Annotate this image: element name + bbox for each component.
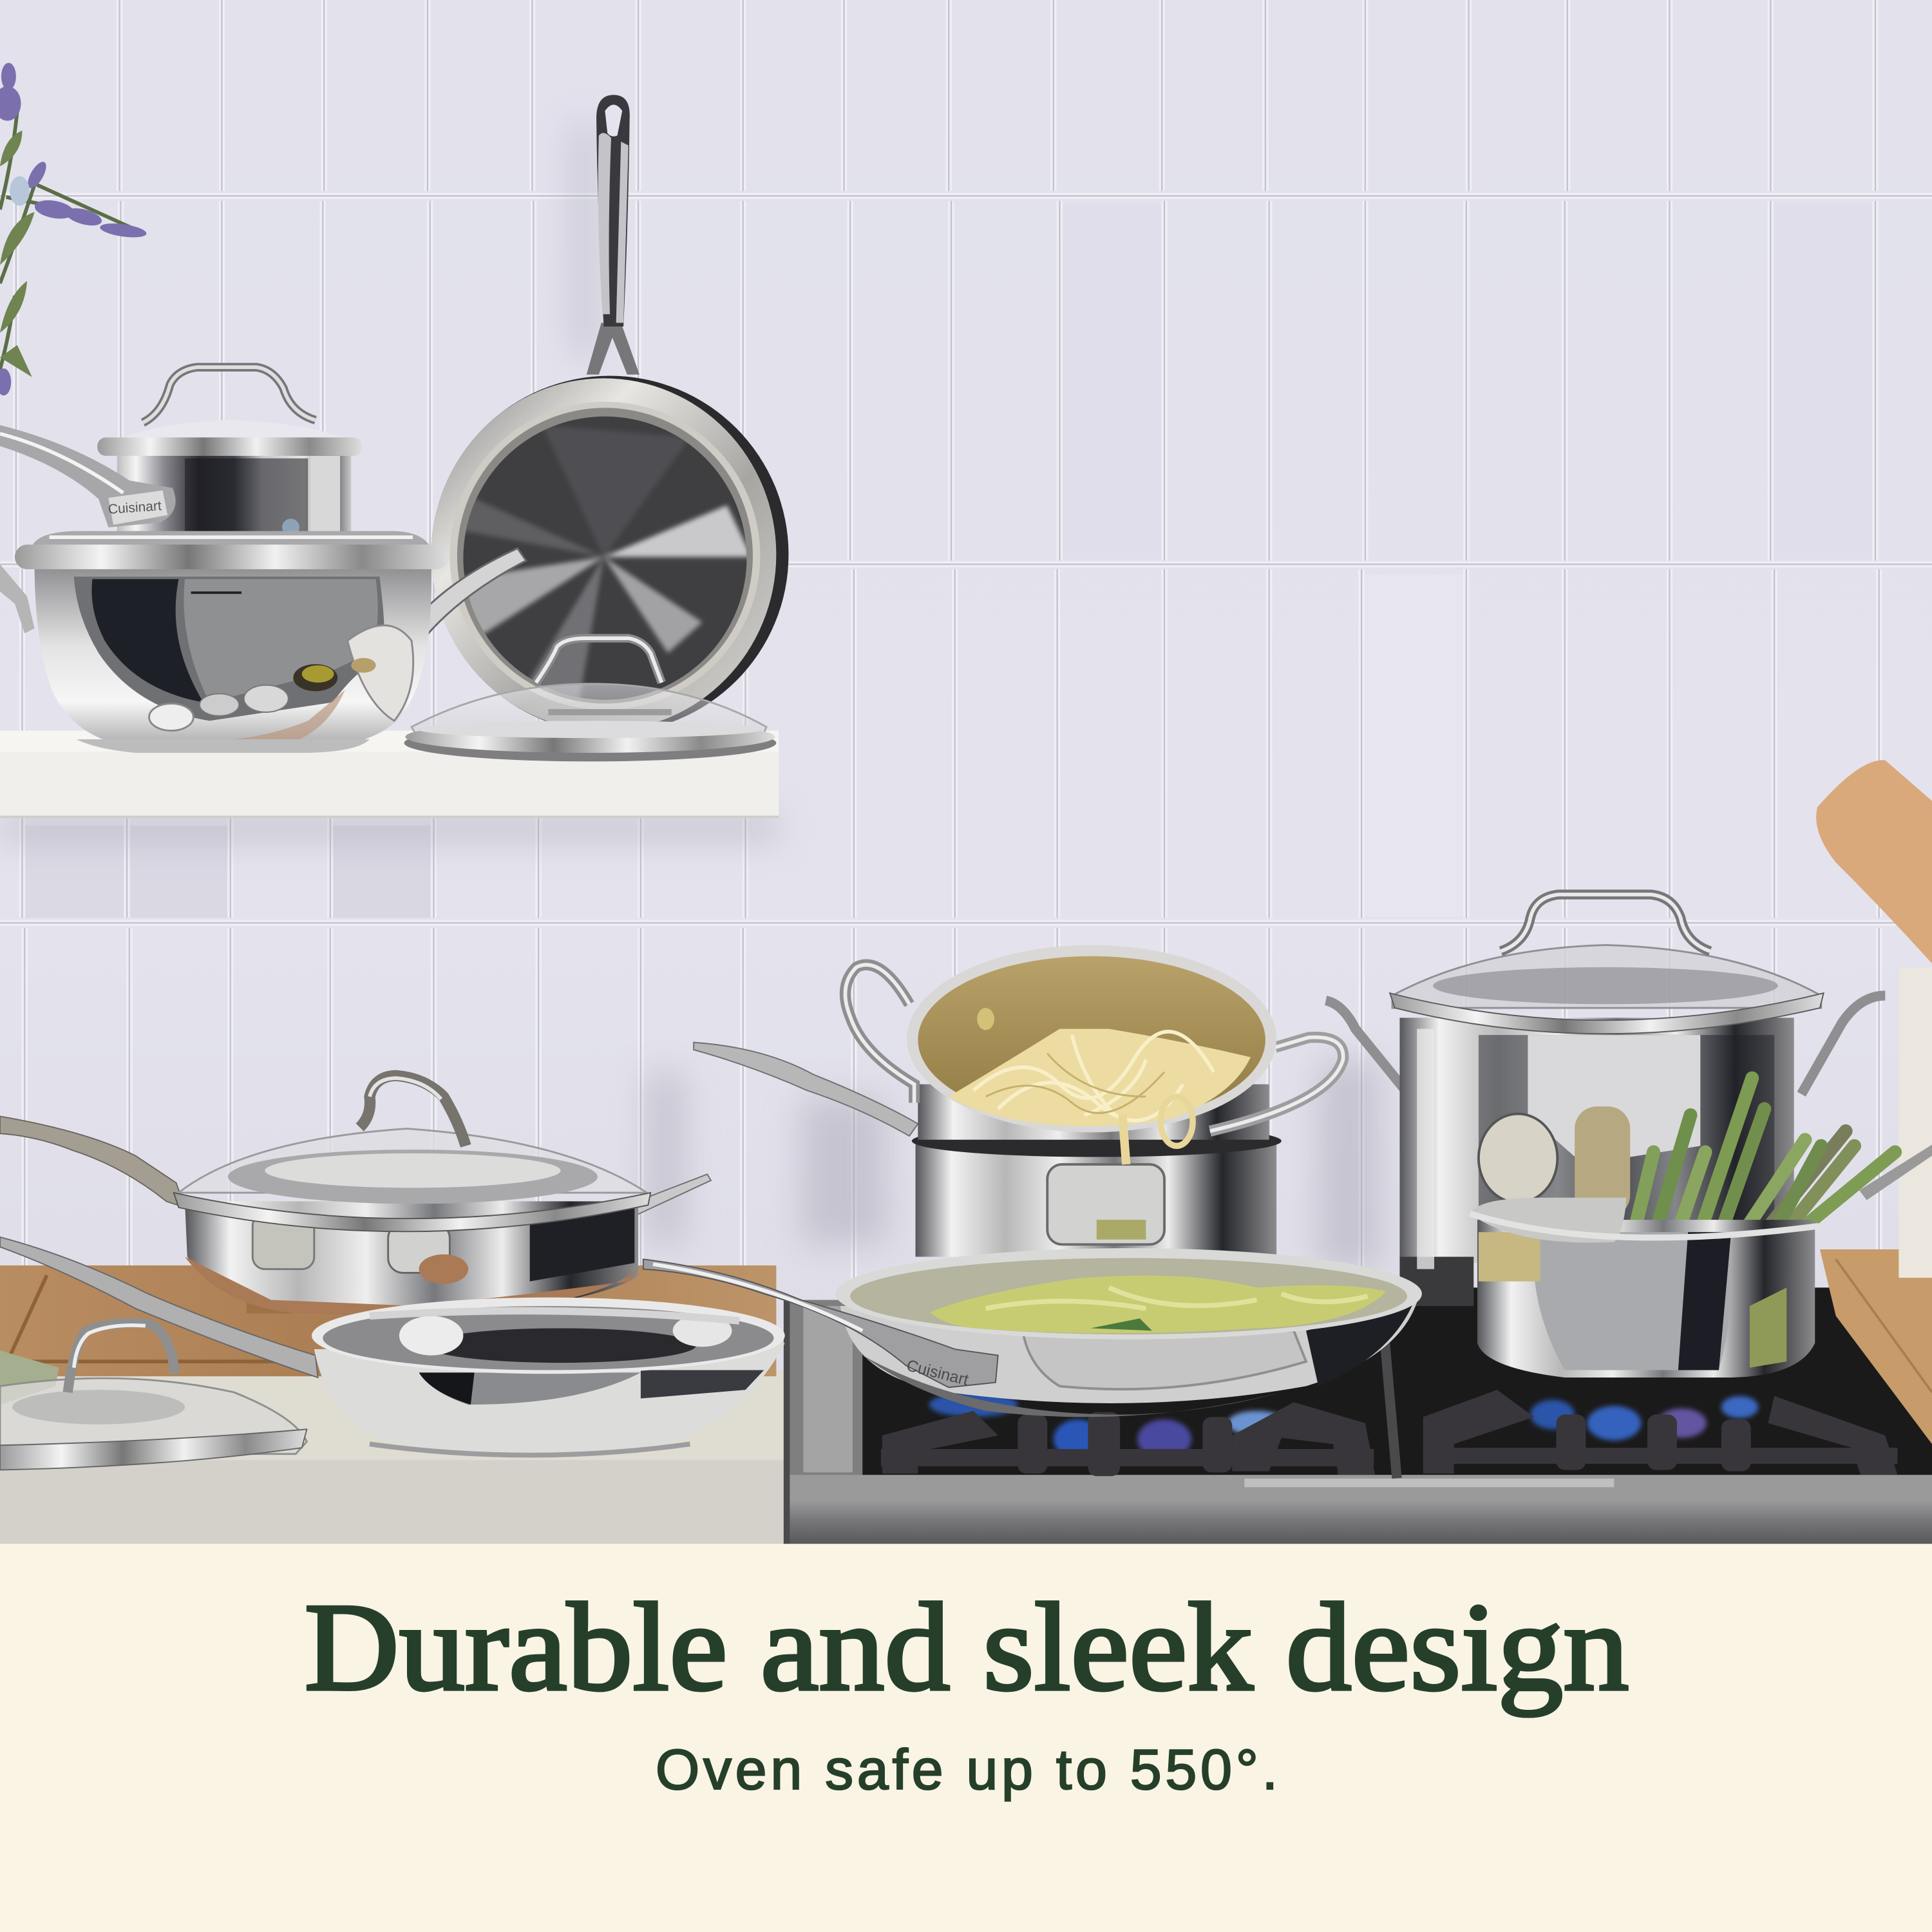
lid bbox=[97, 367, 363, 456]
wall shadows bbox=[0, 123, 1380, 1269]
handle bbox=[0, 1237, 318, 1378]
flames right bbox=[1530, 1396, 1758, 1441]
skillet on counter bbox=[0, 1237, 785, 1455]
burners bbox=[881, 1390, 1897, 1476]
photo: kitchen scene bbox=[0, 0, 1932, 1544]
lid bbox=[1390, 895, 1824, 1034]
pan handle bbox=[587, 95, 639, 375]
small saucepan with lid bbox=[0, 367, 362, 537]
large saucier bbox=[0, 531, 526, 753]
canister bbox=[1899, 967, 1932, 1278]
pot handles bbox=[1326, 996, 1885, 1094]
cutting board bbox=[0, 1265, 776, 1376]
counter bbox=[0, 1370, 788, 1544]
left handle bbox=[0, 564, 35, 633]
right wooden board bbox=[1820, 1249, 1932, 1444]
caption band bbox=[0, 1544, 1932, 1932]
right handle bbox=[409, 548, 526, 665]
pan handle bbox=[643, 1259, 998, 1387]
right handle bbox=[549, 1174, 711, 1267]
pasta pot tilted bbox=[845, 945, 1343, 1164]
stove bbox=[784, 1249, 1932, 1544]
saute pan with pesto pasta bbox=[643, 1248, 1422, 1417]
saucepan with asparagus bbox=[1470, 1078, 1932, 1378]
wooden spoon bbox=[1816, 760, 1932, 963]
small saucepan with lid: Cuisinart bbox=[108, 498, 162, 517]
glass lid on shelf bbox=[404, 638, 776, 761]
shelf bbox=[0, 731, 779, 818]
hanging frying pan bbox=[431, 95, 788, 733]
long pan handle bbox=[694, 1043, 918, 1136]
left handle bbox=[0, 1116, 185, 1208]
flames left bbox=[929, 1392, 1286, 1459]
loose glass lid bbox=[0, 1323, 307, 1470]
stock pot bbox=[1326, 895, 1885, 1306]
towel bbox=[0, 1350, 59, 1405]
grates bbox=[881, 1390, 1897, 1476]
tiled wall bbox=[0, 0, 1932, 1544]
subheading: Oven safe up to 550°. bbox=[656, 1738, 1278, 1801]
flowers bbox=[0, 63, 147, 395]
pot handles bbox=[845, 965, 1343, 1131]
lid bbox=[174, 1075, 650, 1231]
asparagus bbox=[1633, 1078, 1895, 1238]
saute pan with pesto pasta: Cuisinart bbox=[905, 1356, 971, 1389]
saute pan with lid bbox=[0, 1075, 711, 1316]
lower pot bbox=[912, 1125, 1282, 1257]
heading: Durable and sleek design bbox=[305, 1578, 1629, 1717]
side handle bbox=[0, 425, 176, 527]
